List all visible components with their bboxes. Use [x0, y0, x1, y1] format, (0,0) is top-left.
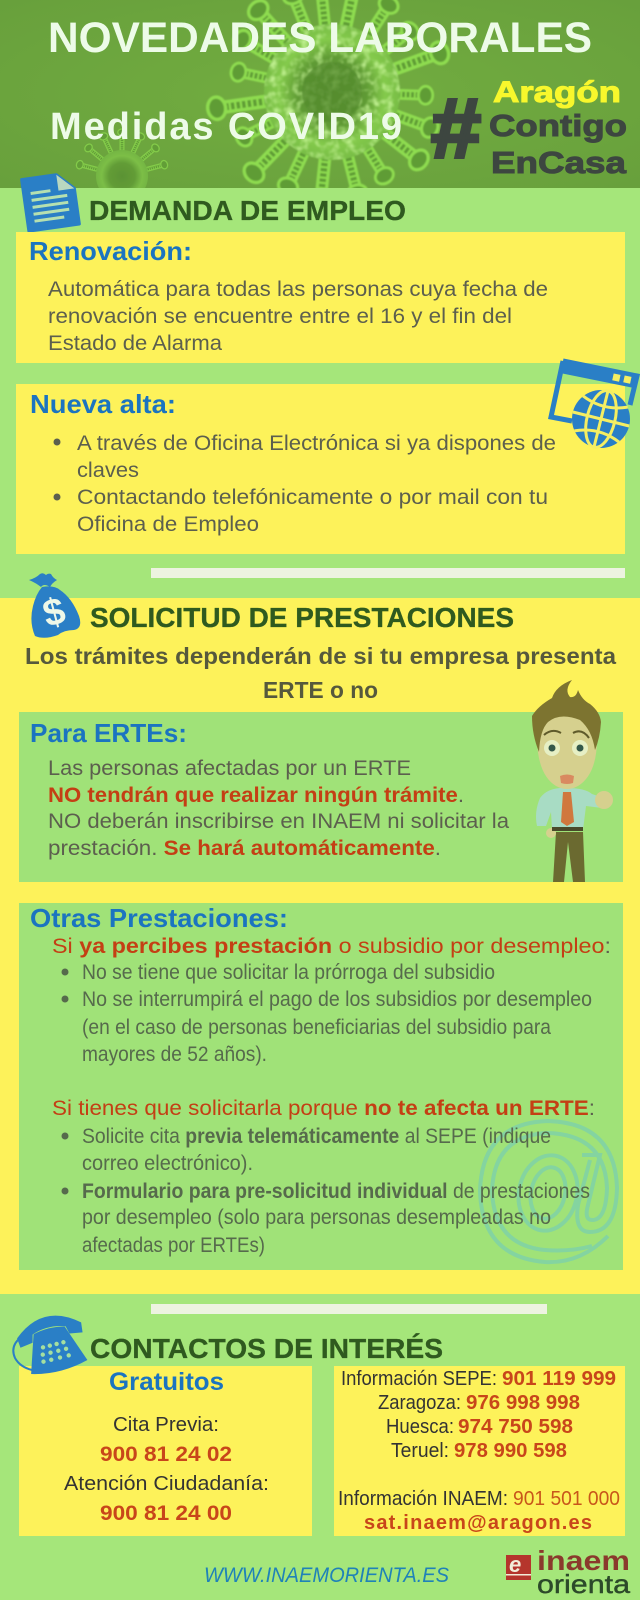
panel: gratuitos: 900 81 24 02	[100, 1443, 232, 1466]
small virus illustration	[76, 128, 168, 188]
panel: para ERTEs: prestación. Se hará automáticamente .	[48, 837, 441, 860]
subtitle: Medidas COVID19	[50, 106, 402, 148]
panel: otras prestaciones: correo electrónico).	[82, 1152, 253, 1175]
panel: otras prestaciones: Formulario para pre-solicitud individual de prestaciones	[82, 1180, 590, 1203]
panel: renovación: Renovación:	[29, 236, 192, 266]
hashtag logo	[431, 76, 627, 180]
hashtag logo: EnCasa	[491, 145, 627, 180]
panel: otras prestaciones	[19, 903, 623, 1270]
divider bar	[151, 568, 625, 578]
panel: teléfonos de información: Teruel:	[391, 1440, 449, 1462]
icon: money bag	[29, 573, 80, 638]
panel: otras prestaciones: mayores de 52 años).	[82, 1043, 267, 1066]
panel: renovación: Automática para todas las personas cuya fecha de	[48, 278, 548, 301]
panel: teléfonos de información: Huesca:	[386, 1416, 454, 1438]
panel: teléfonos de información: 976 998 998	[466, 1392, 580, 1414]
logo: inaem orienta: inaem	[537, 1545, 630, 1576]
panel: nueva alta	[16, 384, 625, 554]
panel: gratuitos: Gratuitos	[109, 1368, 224, 1396]
heading: solicitud de prestaciones: SOLICITUD DE PRESTACIONES	[90, 602, 514, 633]
panel: renovación: renovación se encuentre entre el 16 y el fin del	[48, 305, 512, 328]
panel: otras prestaciones: (en el caso de personas beneficiarias del subsidio para	[82, 1016, 551, 1039]
panel: para ERTEs: NO deberán inscribirse en INAEM ni solicitar la	[48, 810, 509, 833]
panel: otras prestaciones: No se interrumpirá el pago de los subsidios por desempleo	[82, 988, 592, 1011]
panel: otras prestaciones: Si tienes que solicitarla porque no te afecta un ERTE :	[52, 1097, 595, 1120]
icon: browser window and globe	[551, 361, 637, 454]
heading: demanda de empleo: DEMANDA DE EMPLEO	[89, 195, 406, 226]
intro text: Los trámites dependerán de si tu empresa presenta	[25, 643, 616, 669]
hashtag logo: #	[431, 81, 481, 175]
panel: gratuitos: 900 81 24 00	[100, 1502, 232, 1525]
icon: document	[22, 172, 79, 231]
logo: inaem orienta: e	[509, 1552, 521, 1577]
panel: teléfonos de información: Información SEPE:	[341, 1368, 497, 1390]
logo: inaem orienta: orienta	[537, 1569, 631, 1599]
icon: money bag: $	[39, 590, 70, 636]
virus illustration	[206, 0, 451, 188]
panel: teléfonos de información: Zaragoza:	[378, 1392, 461, 1414]
logo: inaem orienta	[506, 1545, 631, 1599]
header background with virus image	[0, 0, 640, 188]
panel: renovación	[16, 232, 625, 363]
hashtag logo: Aragón	[493, 76, 621, 109]
title: NOVEDADES LABORALES	[48, 14, 592, 62]
panel: nueva alta: Contactando telefónicamente o por mail con tu	[77, 486, 548, 509]
panel: teléfonos de información: 978 990 598	[454, 1440, 567, 1462]
panel: para ERTEs: Las personas afectadas por un ERTE	[48, 757, 411, 780]
panel: otras prestaciones: por desempleo (solo para personas desempleadas no	[82, 1206, 551, 1229]
section background: solicitud de prestaciones	[0, 598, 640, 1294]
panel: gratuitos	[19, 1366, 312, 1536]
icon: man with tie	[532, 680, 613, 882]
panel: teléfonos de información: sat.inaem@aragon.es	[364, 1512, 592, 1534]
panel: otras prestaciones: No se tiene que solicitar la prórroga del subsidio	[82, 961, 495, 984]
intro text	[25, 643, 616, 703]
panel: teléfonos de información: 901 501 000	[513, 1488, 620, 1510]
panel: gratuitos: Atención Ciudadanía:	[64, 1473, 269, 1495]
panel: para ERTEs: NO tendrán que realizar ningún trámite .	[48, 784, 464, 807]
panel: otras prestaciones: Otras Prestaciones:	[30, 903, 288, 933]
panel: para ERTEs	[19, 712, 623, 882]
panel: nueva alta: claves	[77, 459, 139, 482]
icon: at sign	[480, 1121, 617, 1262]
icon: telephone	[13, 1309, 91, 1379]
divider bar	[151, 1304, 547, 1314]
panel: otras prestaciones: afectadas por ERTEs)	[82, 1234, 265, 1257]
panel: nueva alta: Nueva alta:	[30, 389, 176, 419]
panel: teléfonos de información: Información INAEM:	[338, 1488, 508, 1510]
heading: contactos de interés: CONTACTOS DE INTERÉS	[90, 1333, 443, 1364]
panel: teléfonos de información: 974 750 598	[458, 1416, 573, 1438]
panel: otras prestaciones: Si ya percibes prestación o subsidio por desempleo :	[52, 935, 611, 958]
intro text: ERTE o no	[263, 677, 378, 703]
panel: otras prestaciones: Solicite cita previa telemáticamente al SEPE (indique	[82, 1125, 551, 1148]
panel: gratuitos: Cita Previa:	[113, 1414, 219, 1436]
panel: teléfonos de información: 901 119 999	[502, 1368, 616, 1390]
hashtag logo: Contigo	[489, 108, 627, 143]
panel: renovación: Estado de Alarma	[48, 332, 222, 355]
website link: WWW.INAEMORIENTA.ES	[204, 1564, 449, 1587]
panel: para ERTEs: Para ERTEs:	[30, 718, 187, 748]
section background: demanda de empleo	[0, 188, 640, 598]
section background: contactos	[0, 1294, 640, 1600]
panel: nueva alta: A través de Oficina Electrónica si ya dispones de	[77, 432, 556, 455]
panel: teléfonos de información	[334, 1366, 625, 1536]
panel: nueva alta: Oficina de Empleo	[77, 513, 259, 536]
